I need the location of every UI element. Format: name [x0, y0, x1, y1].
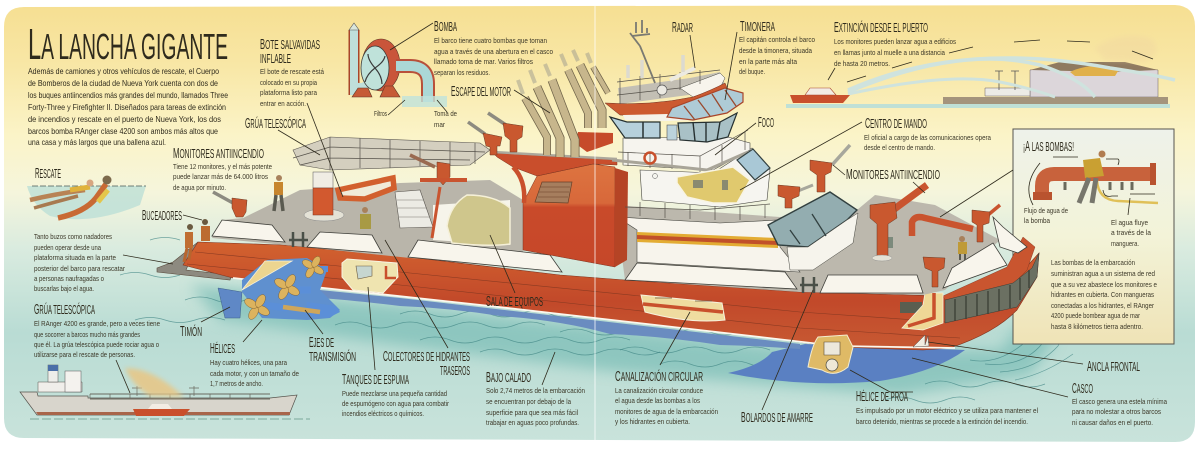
- label: extinción desde el puerto: Los monitores pueden lanzar agua a edificios: [834, 37, 956, 46]
- inset text: la bomba: [1024, 216, 1051, 225]
- label: filtros: Filtros: [374, 109, 387, 118]
- blue stripe below the waterline: [320, 290, 800, 349]
- intro text: los buques antiincendios más grandes del mundo, llamados Three: [28, 90, 228, 100]
- label: monitores antiincendio (bow): MONITORES ANTIINCENDIO: [846, 166, 940, 183]
- bow thruster cutaway: [808, 335, 853, 373]
- rear monitors: [213, 113, 523, 238]
- label: grúa telescópica (lower): que socorrer a barcos mucho más grandes: [34, 330, 140, 339]
- label: bote salvavidas inflable: BOTE SALVAVIDAS: [260, 36, 320, 53]
- stern cutaway with propellers: [218, 255, 340, 321]
- text: FOCO: [758, 114, 774, 131]
- label: casco: CASCO: [1072, 380, 1093, 397]
- label: tanques de espuma: incendios eléctricos o químicos.: [342, 409, 424, 418]
- label: casco: El casco genera una estela mínima: [1072, 397, 1168, 406]
- label: bote salvavidas inflable: colocado en su propia: [260, 78, 318, 87]
- text: divers: a personas naufragadas o: [34, 274, 104, 283]
- gray aft deck: [212, 180, 523, 265]
- label: tanques de espuma: TANQUES DE ESPUMA: [342, 371, 409, 388]
- label: radar: RADAR: [672, 19, 693, 36]
- label: bajo calado: Solo 2,74 metros de la embarcación: [486, 386, 585, 395]
- label: centro de mando: CENTRO DE MANDO: [865, 115, 927, 132]
- label: bomba: BOMBA: [434, 18, 457, 35]
- label: timonera: desde la timonera, situada: [739, 46, 813, 55]
- label: hélices: cada motor, y con un tamaño de: [210, 369, 299, 378]
- inset text: hasta 8 kilómetros tierra adentro.: [1051, 322, 1143, 331]
- intro text: Además de camiones y otros vehículos de rescate, el Cuerpo: [28, 66, 219, 76]
- label: grúa telescópica (lower): que él. La grúa telescópica puede rociar agua o: [34, 340, 159, 349]
- inset text: ¡A LAS BOMBAS!: [1023, 138, 1074, 155]
- inset text: hidrantes en cubierta. Con mangueras: [1051, 290, 1154, 299]
- white waterline stripe: [233, 278, 955, 348]
- label: bajo calado: [486, 369, 585, 427]
- label: bomba: agua a través de una abertura en el casco: [434, 47, 553, 56]
- label: monitores antiincendio: de agua por minuto.: [173, 183, 226, 192]
- exhaust pipes: [518, 50, 608, 157]
- foam tank cutaway: [342, 259, 398, 293]
- sea around the boat: [120, 238, 1073, 403]
- white lower house with stripe: [617, 192, 858, 272]
- text: divers: Tanto buzos como nadadores: [34, 232, 112, 241]
- label: toma de mar: [434, 109, 457, 129]
- label: bajo calado: se encuentran por debajo de la: [486, 397, 572, 406]
- label: hélices: [210, 340, 299, 388]
- arrows in harbour scene: [847, 40, 1153, 82]
- intro text: [28, 66, 228, 147]
- equipment room cutaway: [433, 200, 510, 245]
- label: grúa telescópica (lower): GRÚA TELESCÓPICA: [34, 301, 95, 318]
- label: centro de mando: desde el centro de mando.: [864, 143, 935, 152]
- inset text: Flujo de agua de: [1024, 206, 1068, 215]
- label: bajo calado: superficie para que sea más fácil: [486, 408, 578, 417]
- label: hélice de proa: Es impulsado por un motor eléctrico y se utiliza para mantener el: [856, 406, 1038, 415]
- red hull: [183, 242, 1039, 350]
- illustration: harbour fire scene: [786, 36, 1175, 108]
- crane and inflatable boat: [293, 137, 490, 221]
- white upper house: [612, 130, 770, 220]
- title: LA LANCHA GIGANTE: [28, 20, 228, 69]
- label: canalización circular: [615, 368, 718, 426]
- intro text: de Bomberos de la ciudad de Nueva York cuenta con dos de: [28, 78, 218, 88]
- illustration: tanker with small fire boat: [20, 365, 310, 419]
- label: bote salvavidas inflable: plataforma listo para: [260, 88, 318, 97]
- label: tanques de espuma: Puede mezclarse una pequeña cantidad: [342, 389, 447, 398]
- label: canalización circular: y los hidrantes en cubierta.: [615, 417, 690, 426]
- label: casco: para no molestar a otros barcos: [1072, 407, 1161, 416]
- label: canalización circular: monitores de agua de la embarcación: [615, 407, 718, 416]
- label: centro de mando: [864, 115, 992, 152]
- inset text: 4200 puede bombear agua de mar: [1051, 311, 1140, 320]
- label: bomba: llamado toma de mar. Varios filtros: [434, 57, 533, 66]
- label: bajo calado: trabajar en aguas poco profundas.: [486, 418, 579, 427]
- label: canalización circular: el agua desde las bombas a los: [615, 396, 700, 405]
- text: TRASEROS: [440, 363, 470, 378]
- text: divers: [34, 232, 125, 293]
- text: RESCATE: [35, 165, 61, 182]
- label: extinción desde el puerto: de hasta 20 metros.: [834, 59, 890, 68]
- inset text: El agua fluye: [1111, 218, 1148, 227]
- label: grúa telescópica (lower): [34, 301, 160, 359]
- label: canalización circular: La canalización circular conduce: [615, 386, 703, 395]
- white stacked crates: [395, 190, 433, 228]
- label: hélice de proa: HÉLICE DE PROA: [856, 388, 908, 405]
- mooring bollards: [289, 232, 818, 293]
- inset text: que a su vez abastece los monitores e: [1051, 280, 1157, 289]
- inset text: conectadas a los hidrantes, el RAnger: [1051, 301, 1154, 310]
- label: monitores antiincendio: MONITORES ANTIINCENDIO: [173, 145, 264, 162]
- label: grúa telescópica (lower): utilizarse para el rescate de personas.: [34, 350, 135, 359]
- text: divers: plataforma situada en la parte: [34, 253, 116, 262]
- deck boxes: [212, 217, 1027, 293]
- intro text: de incendios y rescate en el puerto de Nueva York, los dos: [28, 114, 221, 124]
- label: bote salvavidas inflable: entrar en acción.: [260, 99, 306, 108]
- label: casco: [1072, 380, 1168, 427]
- text: divers: buscarlas bajo el agua.: [34, 284, 94, 293]
- intro text: Forty-Three y Firefighter II. Diseñados para tareas de extinción: [28, 102, 226, 112]
- label: colectores de hidrantes traseros: [383, 348, 470, 378]
- bow fender: [945, 253, 1039, 323]
- label: toma de mar: Toma de: [434, 109, 457, 118]
- illustration: fire boat: [157, 20, 1039, 383]
- red engine block: [493, 132, 628, 267]
- inset: firefighter: [1079, 150, 1106, 203]
- label: timonera: TIMONERA: [740, 18, 775, 35]
- inset text: Las bombas de la embarcación: [1051, 258, 1135, 267]
- text: GRÚA TELESCÓPICA: [245, 115, 306, 132]
- label: monitores antiincendio: puede lanzar más de 64.000 litros: [173, 172, 268, 181]
- label: bomba: El barco tiene cuatro bombas que toman: [434, 36, 547, 45]
- wheelhouse: [605, 20, 743, 142]
- inset: yellow hose: [1097, 180, 1158, 203]
- inset panel: ¡A las bombas!: [1013, 129, 1174, 344]
- label: toma de mar: mar: [434, 120, 445, 129]
- anchor: [913, 335, 929, 347]
- text: BUCEADORES: [142, 207, 182, 224]
- label: hélices: 1,7 metros de ancho.: [210, 379, 263, 388]
- inset text: manguera.: [1111, 239, 1139, 248]
- label: timonera: El capitán controla el barco: [739, 35, 815, 44]
- inset: arrows: [1029, 157, 1155, 215]
- gray mid and bow deck: [615, 195, 1000, 295]
- label: monitores antiincendio: [173, 145, 272, 192]
- label: hélice de proa: [856, 388, 1038, 426]
- label: ancla frontal: ANCLA FRONTAL: [1087, 358, 1140, 375]
- label: ejes de transmisión: EJES DE: [309, 334, 334, 351]
- label: hélices: HÉLICES: [210, 340, 235, 357]
- leader lines: [116, 23, 1083, 410]
- label: sala de equipos: SALA DE EQUIPOS: [486, 293, 543, 310]
- bow monitors: [778, 145, 1000, 287]
- label: extinción desde el puerto: [834, 19, 956, 68]
- label: bomba: [434, 18, 553, 77]
- label: tanques de espuma: [342, 371, 449, 418]
- intro text: una casa y más largos que una ballena azul.: [28, 137, 166, 147]
- label: bajo calado: BAJO CALADO: [486, 369, 531, 386]
- illustration: pump cutaway: [349, 23, 447, 107]
- label: bote salvavidas inflable: El bote de rescate está: [260, 67, 325, 76]
- label: hélice de proa: barco detenido, mientras se procede a la extinción del incendio.: [856, 417, 1028, 426]
- label: canalización circular: CANALIZACIÓN CIRCULAR: [615, 368, 703, 385]
- underwater hull at the bow: [728, 344, 965, 383]
- bow red rim: [943, 237, 1035, 300]
- illustration: rescue swimmers: [27, 176, 146, 219]
- label: timonera: [739, 18, 815, 76]
- people on deck: [184, 175, 967, 262]
- label: timonera: en la parte más alta: [739, 57, 798, 66]
- inset text: a través de la: [1111, 228, 1152, 237]
- label: ejes de transmisión: TRANSMISIÓN: [309, 349, 356, 364]
- inset text: suministran agua a un sistema de red: [1051, 269, 1155, 278]
- label: ejes de transmisión: [309, 334, 356, 364]
- label: grúa telescópica (lower): El RAnger 4200 es grande, pero a veces tiene: [34, 319, 160, 328]
- text: ESCAPE DEL MOTOR: [451, 83, 511, 100]
- command centre cutaway: [677, 167, 750, 203]
- text: divers: pueden operar desde una: [34, 243, 102, 252]
- stern platform: [157, 242, 232, 280]
- bow hydrant cutaway: [900, 302, 922, 313]
- intro text: barcos bomba RAnger clase 4200 son ambos más altos que: [28, 126, 218, 136]
- label: centro de mando: El oficial a cargo de las comunicaciones opera: [864, 133, 992, 142]
- label: extinción desde el puerto: EXTINCIÓN DESDE EL PUERTO: [834, 19, 928, 36]
- label: timonera: del buque.: [739, 67, 765, 76]
- text: divers: posterior del barco para rescatar: [34, 264, 125, 273]
- label: tanques de espuma: de espumógeno con agua para combatir: [342, 399, 449, 408]
- inset text: [1023, 138, 1157, 331]
- inset: pump pipe: [1033, 163, 1156, 200]
- label: casco: ni causar daños en el puerto.: [1072, 418, 1153, 427]
- label: bomba: separan los residuos.: [434, 68, 490, 77]
- text: BOLARDOS DE AMARRE: [741, 409, 813, 426]
- label: monitores antiincendio: Tiene 12 monitores, y el más potente: [173, 162, 272, 171]
- label: bote salvavidas inflable: INFLABLE: [260, 51, 291, 66]
- label: hélices: Hay cuatro hélices, una para: [210, 358, 288, 367]
- label: bote salvavidas inflable: [260, 36, 325, 108]
- label: timón: TIMÓN: [180, 323, 202, 340]
- text: COLECTORES DE HIDRANTES: [383, 348, 470, 365]
- label: extinción desde el puerto: en llamas junto al muelle a una distancia: [834, 48, 946, 57]
- circular channel cutaway: [641, 295, 725, 321]
